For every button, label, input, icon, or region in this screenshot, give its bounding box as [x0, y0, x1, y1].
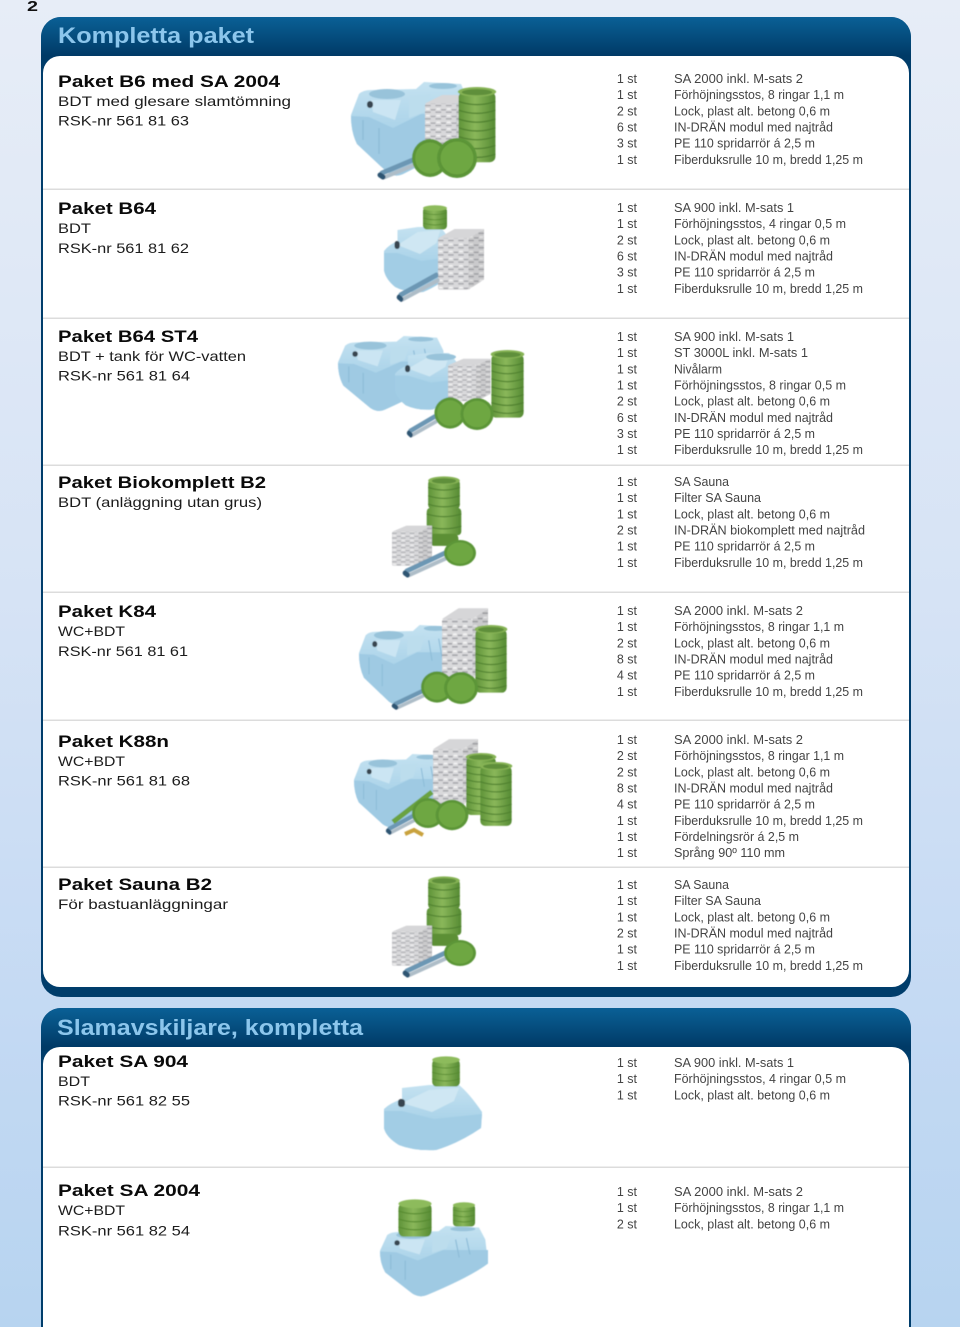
- parts list: B64 ST4: [617, 330, 863, 457]
- text: Biokomplett: Paket Biokomplett B2: [58, 473, 266, 492]
- parts list: Sauna: 1 st: [617, 943, 638, 957]
- text: Paket B64: Paket B64: [58, 199, 157, 218]
- text: Paket B6: [58, 72, 291, 128]
- panel white body: [43, 56, 909, 987]
- parts list: Biokomplett: 1 st: [617, 491, 638, 505]
- text: Paket K84: WC+BDT: [58, 623, 126, 639]
- parts list: B64 ST4: Nivålarm: [674, 362, 722, 376]
- text: Paket B6: RSK-nr 561 81 63: [58, 112, 189, 128]
- parts list: K84: SA 2000 inkl. M-sats 2: [674, 604, 803, 618]
- text: Paket K84: RSK-nr 561 81 61: [58, 643, 188, 659]
- text: Paket K84: [58, 602, 188, 659]
- parts list: B64: 1 st: [617, 217, 638, 231]
- parts list: Biokomplett: PE 110 spridarrör á 2,5 m: [674, 540, 815, 554]
- parts list: SA 904: 1 st: [617, 1072, 638, 1086]
- parts list: SA 2004: 2 st: [617, 1218, 638, 1232]
- parts list: SA 904: SA 900 inkl. M-sats 1: [674, 1056, 794, 1070]
- parts list: B6: 6 st: [617, 120, 638, 134]
- panel frame: [41, 1008, 911, 1327]
- text: Paket SA 904: BDT: [58, 1073, 91, 1089]
- parts list: Sauna: Filter SA Sauna: [674, 894, 761, 908]
- parts list: Biokomplett: Fiberduksrulle 10 m, bredd 1,25 m: [674, 556, 863, 570]
- parts list: B64: 6 st: [617, 250, 638, 264]
- image: B64 ST4 package: [338, 336, 524, 435]
- parts list: K88n: 2 st: [617, 749, 638, 763]
- parts list: B64: IN-DRÄN modul med najtråd: [674, 250, 833, 264]
- section heading: Slamavskiljare, kompletta: [57, 1015, 364, 1040]
- text: Paket K84: Paket K84: [58, 602, 157, 621]
- text: Paket B64 ST4: RSK-nr 561 81 64: [58, 368, 190, 384]
- parts list: SA 2004: SA 2000 inkl. M-sats 2: [674, 1185, 803, 1199]
- parts list: K88n: 1 st: [617, 814, 638, 828]
- parts list: Sauna: Lock, plast alt. betong 0,6 m: [674, 910, 830, 924]
- parts list: K84: 2 st: [617, 636, 638, 650]
- parts list: SA 2004: [617, 1185, 844, 1232]
- parts list: K84: Förhöjningsstos, 8 ringar 1,1 m: [674, 620, 844, 634]
- text: Paket SA 2004: RSK-nr 561 82 54: [58, 1222, 190, 1238]
- parts list: B64 ST4: Förhöjningsstos, 8 ringar 0,5 m: [674, 378, 846, 392]
- parts list: K88n: 1 st: [617, 846, 638, 860]
- text: Biokomplett: BDT (anläggning utan grus): [58, 494, 262, 510]
- parts list: B64 ST4: 3 st: [617, 427, 638, 441]
- panel header band: [41, 1008, 911, 1051]
- parts list: K88n: SA 2000 inkl. M-sats 2: [674, 733, 803, 747]
- row: Paket Biokomplett B2: [58, 473, 865, 575]
- panel white body: [43, 1047, 909, 1327]
- parts list: B6: IN-DRÄN modul med najtråd: [674, 120, 833, 134]
- parts list: B64 ST4: 1 st: [617, 346, 638, 360]
- text: Biokomplett: [58, 473, 266, 510]
- row: Paket K84: [58, 602, 863, 708]
- parts list: Sauna: IN-DRÄN modul med najtråd: [674, 926, 833, 940]
- parts list: K88n: Fördelningsrör á 2,5 m: [674, 830, 799, 844]
- parts list: K88n: PE 110 spridarrör á 2,5 m: [674, 798, 815, 812]
- section heading: Kompletta paket: [58, 23, 255, 48]
- row: Paket K88n: [58, 732, 863, 860]
- parts list: B64 ST4: PE 110 spridarrör á 2,5 m: [674, 427, 815, 441]
- parts list: K88n: [617, 733, 863, 860]
- image: B6 package: [351, 82, 496, 178]
- text: Paket B64 ST4: Paket B64 ST4: [58, 327, 199, 346]
- parts list: B64 ST4: 1 st: [617, 362, 638, 376]
- row: Paket B64 ST4: [58, 327, 863, 457]
- parts list: B64 ST4: 1 st: [617, 330, 638, 344]
- parts list: Sauna: 1 st: [617, 959, 638, 973]
- parts list: B64: 3 st: [617, 266, 638, 280]
- text: Paket B64: RSK-nr 561 81 62: [58, 240, 189, 256]
- text: Paket SA 2004: WC+BDT: [58, 1202, 126, 1218]
- parts list: SA 2004: 1 st: [617, 1185, 638, 1199]
- parts list: Biokomplett: Filter SA Sauna: [674, 491, 761, 505]
- parts list: B64: 2 st: [617, 234, 638, 248]
- row: Paket B64: [58, 199, 863, 299]
- parts list: B64 ST4: 6 st: [617, 411, 638, 425]
- parts list: K84: 4 st: [617, 669, 638, 683]
- text: Paket B64 ST4: [58, 327, 246, 384]
- parts list: K84: Lock, plast alt. betong 0,6 m: [674, 636, 830, 650]
- text: Paket SA 904: [58, 1052, 190, 1108]
- image: Sauna package: [392, 876, 476, 975]
- panel: Slamavskiljare, kompletta: [41, 1008, 911, 1327]
- parts list: Sauna: SA Sauna: [674, 878, 729, 892]
- parts list: K88n: 4 st: [617, 798, 638, 812]
- image: K84 package: [359, 608, 507, 708]
- text: Paket Sauna B2: [58, 875, 228, 912]
- parts list: Sauna: 2 st: [617, 926, 638, 940]
- text: Paket B64: BDT: [58, 220, 92, 236]
- text: Paket K88n: Paket K88n: [58, 732, 169, 751]
- text: Paket B64: [58, 199, 189, 256]
- parts list: Biokomplett: IN-DRÄN biokomplett med najtråd: [674, 524, 865, 538]
- parts list: Sauna: [617, 878, 863, 973]
- row: Paket SA 904: [58, 1052, 846, 1150]
- text: Paket B64 ST4: BDT + tank för WC-vatten: [58, 348, 246, 364]
- parts list: K88n: Fiberduksrulle 10 m, bredd 1,25 m: [674, 814, 863, 828]
- parts list: SA 904: [617, 1056, 846, 1102]
- parts list: K88n: 1 st: [617, 733, 638, 747]
- parts list: K84: IN-DRÄN modul med najtråd: [674, 652, 833, 666]
- panel header band: [41, 17, 911, 60]
- parts list: Sauna: 1 st: [617, 910, 638, 924]
- parts list: SA 904: 1 st: [617, 1056, 638, 1070]
- parts list: K88n: Förhöjningsstos, 8 ringar 1,1 m: [674, 749, 844, 763]
- parts list: Biokomplett: [617, 475, 865, 570]
- parts list: B6: 1 st: [617, 153, 638, 167]
- text: Paket K88n: [58, 732, 190, 788]
- text: Paket B6: Paket B6 med SA 2004: [58, 72, 281, 91]
- panel: Kompletta paket: [41, 17, 911, 997]
- parts list: B6: 2 st: [617, 104, 638, 118]
- parts list: K88n: 8 st: [617, 782, 638, 796]
- row: Paket B6 med SA 2004: [58, 72, 863, 178]
- image: B64 package: [384, 205, 484, 299]
- parts list: B64 ST4: 1 st: [617, 378, 638, 392]
- image: K88n package: [354, 739, 512, 835]
- parts list: K84: 1 st: [617, 685, 638, 699]
- image: SA 2004 tank: [380, 1199, 488, 1296]
- parts list: B6: Lock, plast alt. betong 0,6 m: [674, 104, 830, 118]
- parts list: Sauna: PE 110 spridarrör á 2,5 m: [674, 943, 815, 957]
- parts list: K84: Fiberduksrulle 10 m, bredd 1,25 m: [674, 685, 863, 699]
- parts list: Biokomplett: 1 st: [617, 508, 638, 522]
- panel frame: [41, 17, 911, 997]
- parts list: B64 ST4: IN-DRÄN modul med najtråd: [674, 411, 833, 425]
- image: SA 904 tank: [384, 1056, 482, 1150]
- parts list: SA 2004: Förhöjningsstos, 8 ringar 1,1 m: [674, 1201, 844, 1215]
- parts list: SA 904: Förhöjningsstos, 4 ringar 0,5 m: [674, 1072, 846, 1086]
- parts list: B64 ST4: 2 st: [617, 395, 638, 409]
- row: Paket SA 2004: [58, 1181, 844, 1296]
- parts list: K88n: Språng 90º 110 mm: [674, 846, 785, 860]
- parts list: K88n: Lock, plast alt. betong 0,6 m: [674, 766, 830, 780]
- parts list: B64: [617, 201, 863, 296]
- image: Biokomplett package: [392, 476, 476, 575]
- parts list: B64: PE 110 spridarrör á 2,5 m: [674, 266, 815, 280]
- text: Paket SA 2004: [58, 1181, 201, 1238]
- parts list: B64 ST4: ST 3000L inkl. M-sats 1: [674, 346, 808, 360]
- parts list: B6: 1 st: [617, 88, 638, 102]
- parts list: B64 ST4: SA 900 inkl. M-sats 1: [674, 330, 794, 344]
- parts list: B64 ST4: Fiberduksrulle 10 m, bredd 1,25 m: [674, 443, 863, 457]
- parts list: K84: [617, 604, 863, 699]
- parts list: B6: [617, 72, 863, 167]
- parts list: Biokomplett: 1 st: [617, 540, 638, 554]
- text: Paket SA 904: Paket SA 904: [58, 1052, 189, 1071]
- parts list: B6: PE 110 spridarrör á 2,5 m: [674, 137, 815, 151]
- parts list: B6: Fiberduksrulle 10 m, bredd 1,25 m: [674, 153, 863, 167]
- parts list: SA 2004: 1 st: [617, 1201, 638, 1215]
- parts list: Sauna: Fiberduksrulle 10 m, bredd 1,25 m: [674, 959, 863, 973]
- parts list: B64 ST4: Lock, plast alt. betong 0,6 m: [674, 395, 830, 409]
- text: Paket Sauna B2: Paket Sauna B2: [58, 875, 212, 894]
- text: Paket SA 2004: Paket SA 2004: [58, 1181, 201, 1200]
- parts list: B64: 1 st: [617, 201, 638, 215]
- parts list: K84: 1 st: [617, 620, 638, 634]
- parts list: B64: SA 900 inkl. M-sats 1: [674, 201, 794, 215]
- parts list: B6: Förhöjningsstos, 8 ringar 1,1 m: [674, 88, 844, 102]
- parts list: K84: 1 st: [617, 604, 638, 618]
- parts list: Biokomplett: SA Sauna: [674, 475, 729, 489]
- parts list: B6: 3 st: [617, 137, 638, 151]
- text: Paket K88n: WC+BDT: [58, 753, 126, 769]
- parts list: K88n: 2 st: [617, 766, 638, 780]
- parts list: B64: 1 st: [617, 282, 638, 296]
- parts list: Biokomplett: 1 st: [617, 475, 638, 489]
- text: Paket B6: BDT med glesare slamtömning: [58, 93, 291, 109]
- parts list: Sauna: 1 st: [617, 894, 638, 908]
- parts list: B64: Förhöjningsstos, 4 ringar 0,5 m: [674, 217, 846, 231]
- parts list: K84: 8 st: [617, 652, 638, 666]
- parts list: B64: Lock, plast alt. betong 0,6 m: [674, 234, 830, 248]
- parts list: K88n: IN-DRÄN modul med najtråd: [674, 782, 833, 796]
- text: Paket K88n: RSK-nr 561 81 68: [58, 772, 190, 788]
- parts list: K88n: 1 st: [617, 830, 638, 844]
- parts list: SA 904: Lock, plast alt. betong 0,6 m: [674, 1088, 830, 1102]
- parts list: Biokomplett: 2 st: [617, 524, 638, 538]
- parts list: B6: SA 2000 inkl. M-sats 2: [674, 72, 803, 86]
- parts list: Sauna: 1 st: [617, 878, 638, 892]
- parts list: B6: 1 st: [617, 72, 638, 86]
- parts list: K84: PE 110 spridarrör á 2,5 m: [674, 669, 815, 683]
- parts list: B64 ST4: 1 st: [617, 443, 638, 457]
- text: Paket SA 904: RSK-nr 561 82 55: [58, 1092, 190, 1108]
- parts list: SA 2004: Lock, plast alt. betong 0,6 m: [674, 1218, 830, 1232]
- parts list: Biokomplett: 1 st: [617, 556, 638, 570]
- parts list: SA 904: 1 st: [617, 1088, 638, 1102]
- parts list: Biokomplett: Lock, plast alt. betong 0,6 m: [674, 508, 830, 522]
- parts list: B64: Fiberduksrulle 10 m, bredd 1,25 m: [674, 282, 863, 296]
- text: Paket Sauna B2: För bastuanläggningar: [58, 896, 228, 912]
- row: Paket Sauna B2: [58, 875, 863, 975]
